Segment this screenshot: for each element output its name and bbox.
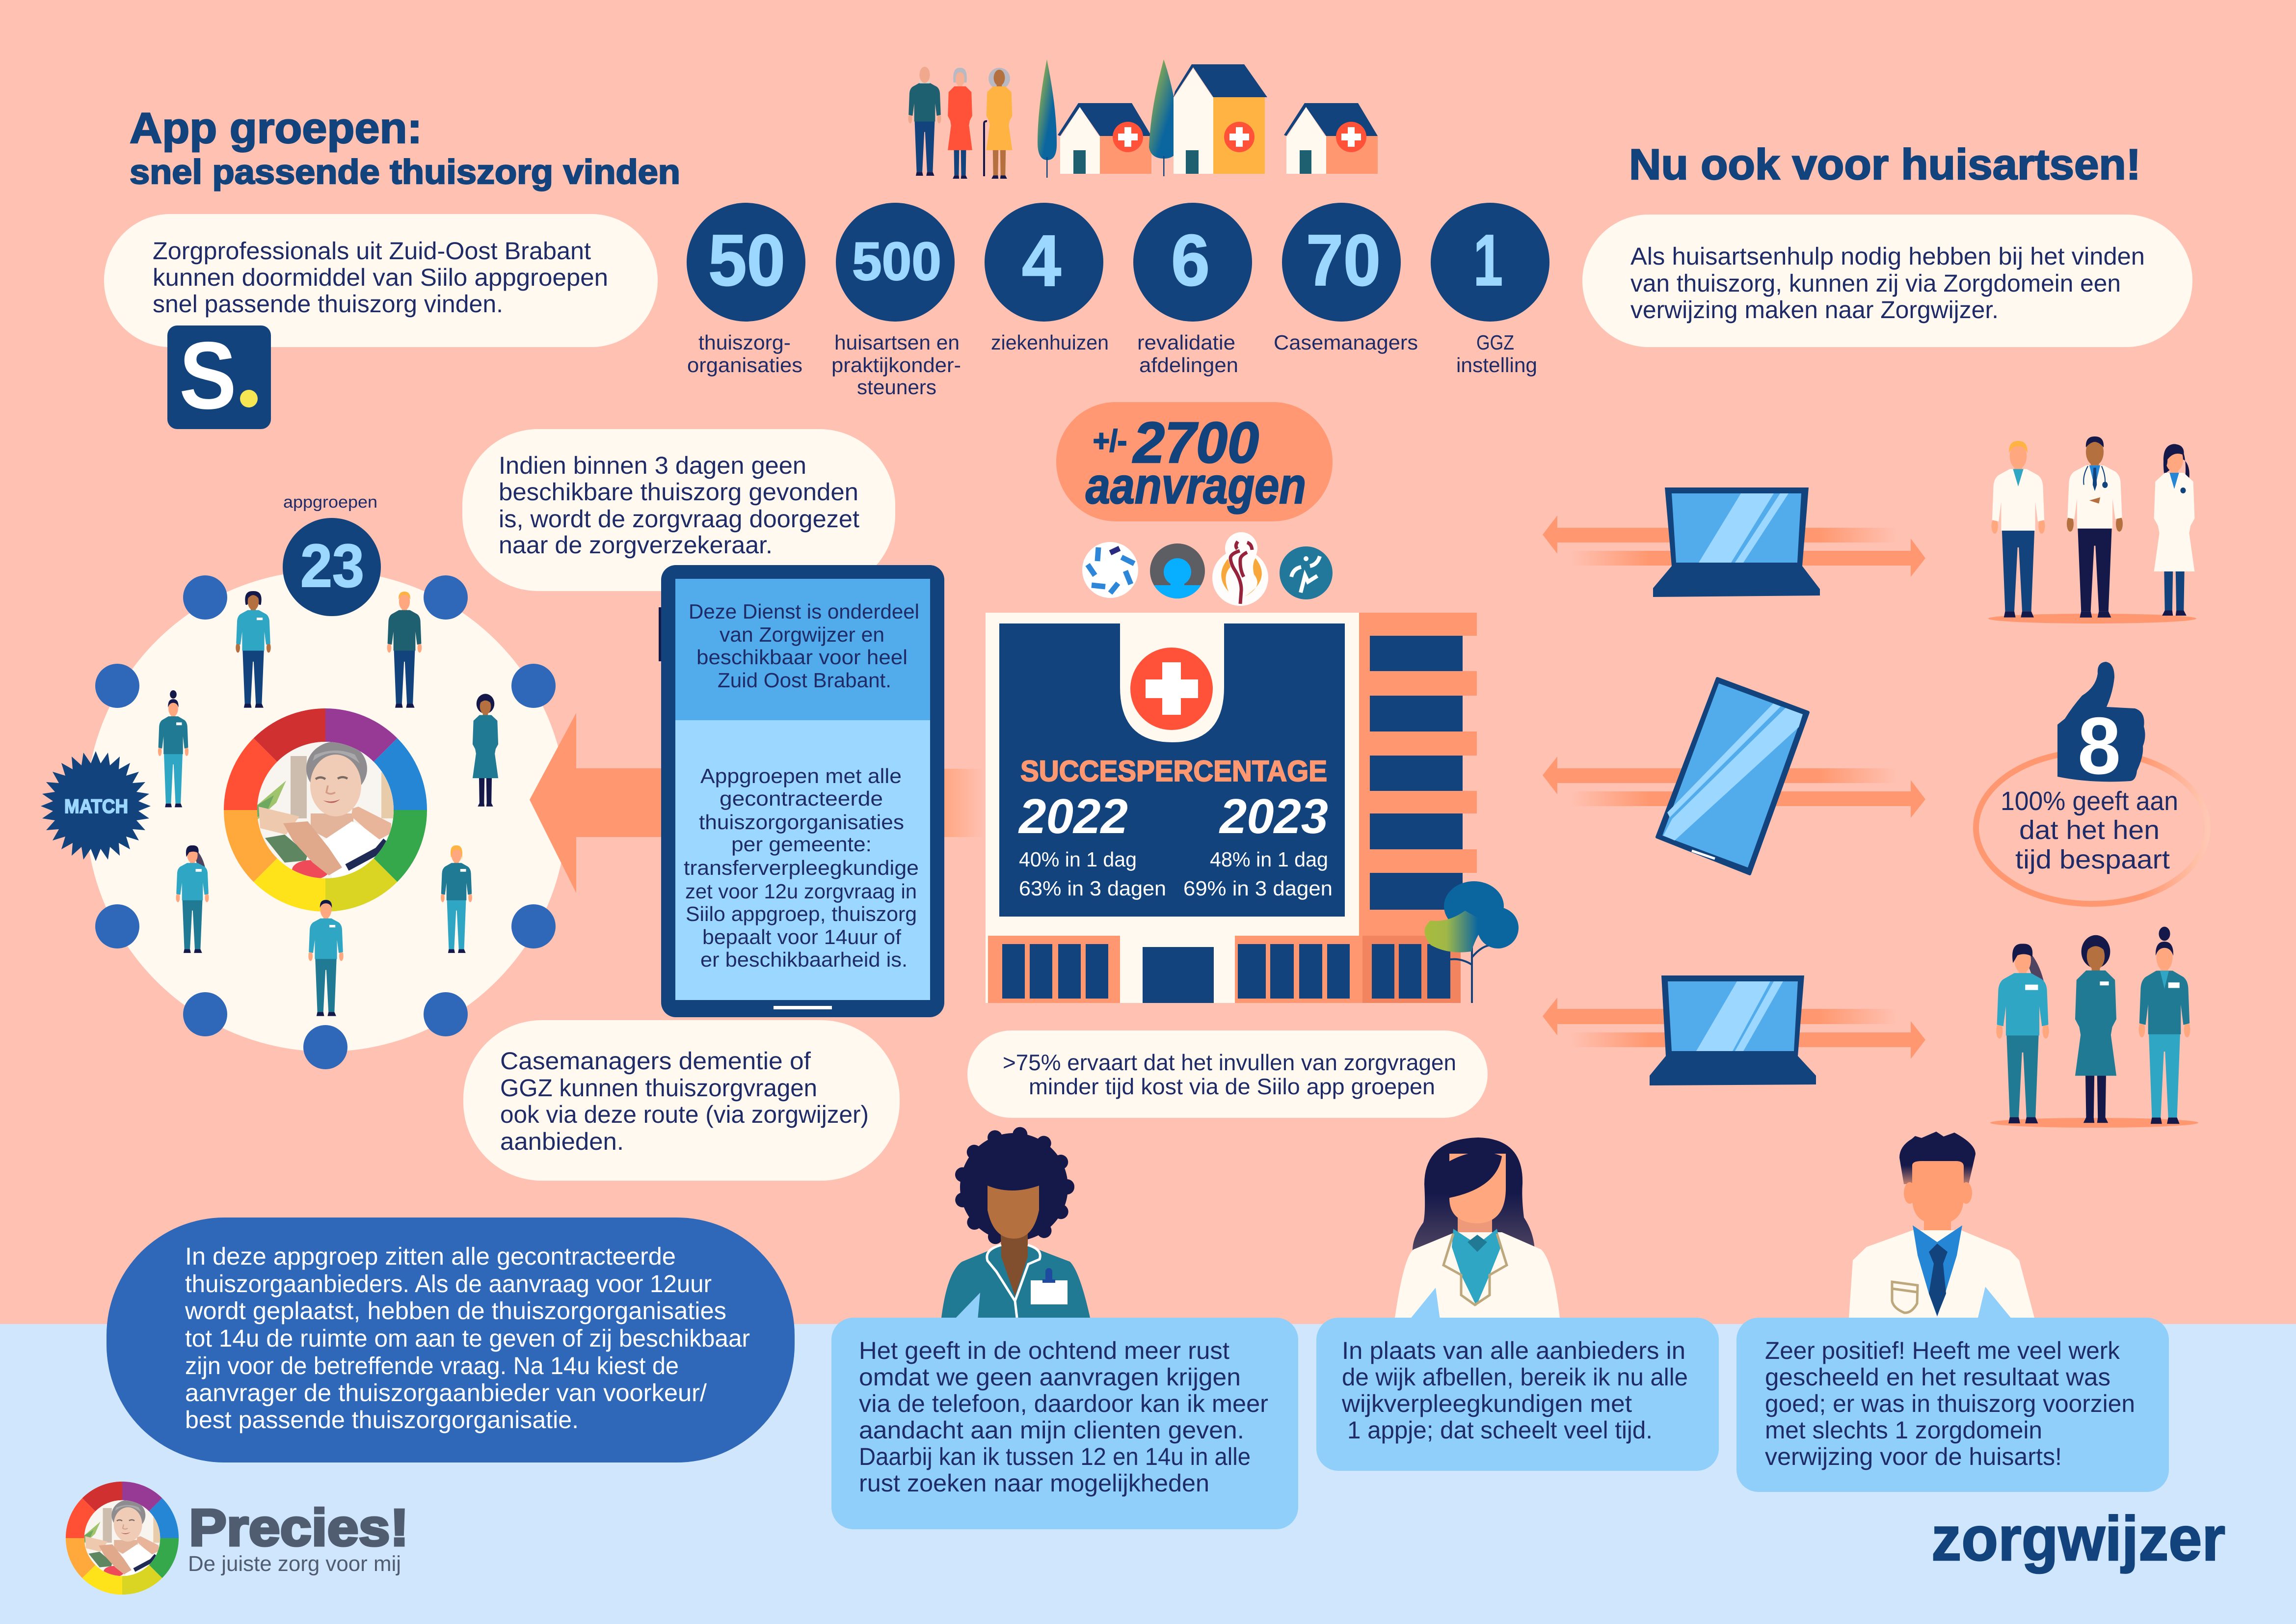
- speech bubble: huisarts quote: met slechts 1 zorgdomein: [1765, 1416, 2042, 1444]
- callout: 2700 aanvragen: 2700: [1132, 410, 1259, 475]
- stat: 70 casemanagers: [1274, 203, 1418, 354]
- stat: 1 GGZ instelling: 1: [1473, 220, 1503, 301]
- icon: tilted tablet: [1657, 678, 1808, 874]
- icon: laptop bottom: [1650, 975, 1816, 1085]
- stat: 1 GGZ instelling: GGZ: [1476, 331, 1514, 354]
- stat: 50 thuiszorgorganisaties: [687, 203, 805, 377]
- panel: 75 procent ervaart: minder tijd kost via de Siilo app groepen: [1029, 1074, 1435, 1099]
- person: nurse in dress: [2075, 935, 2116, 1123]
- phone text: onderdeel van Zorgwijzer: Zuid Oost Brabant.: [718, 669, 891, 692]
- column: 2023: 69% in 3 dagen: [1183, 877, 1333, 900]
- person: female doctor: [2154, 444, 2194, 616]
- person: nurse with bun: [2139, 927, 2190, 1124]
- ground floor windows: [988, 936, 1461, 1003]
- ring: [1976, 752, 2208, 904]
- person: elderly woman in yellow with cane: [984, 68, 1012, 179]
- arrows: huisartsen two way: [1543, 515, 1925, 577]
- person: nurse lower left: [176, 845, 209, 953]
- phone text: appgroepen per gemeente: [684, 764, 919, 971]
- phone text: onderdeel van Zorgwijzer: beschikbaar voor heel: [696, 646, 908, 669]
- person: nurse top left: [236, 591, 271, 708]
- stat: 6 revalidatie afdelingen: revalidatie: [1137, 331, 1235, 354]
- stat: 6 revalidatie afdelingen: 6: [1171, 220, 1210, 301]
- panel: intro zorgprofessionals: Zorgprofessionals uit Zuid-Oost Brabant: [153, 237, 591, 265]
- panel: huisartsen uitleg: van thuiszorg, kunnen zij via Zorgdomein een: [1630, 270, 2121, 297]
- phone text: appgroepen per gemeente: transferverpleegkundige: [684, 856, 919, 879]
- bust: nurse with afro: [941, 1133, 1090, 1318]
- people: thuiszorg: [1990, 927, 2198, 1128]
- tree 2: [1149, 59, 1179, 176]
- tree beside hospital: [1424, 881, 1519, 1003]
- text: tijd bespaart: [2001, 786, 2178, 874]
- panel: zorgvraag doorgezet: naar de zorgverzekeraar.: [499, 531, 773, 559]
- panel: huisartsen uitleg: verwijzing maken naar Zorgwijzer.: [1630, 296, 1999, 324]
- background: light blue lower area: [0, 1324, 2296, 1624]
- text: tijd bespaart: dat het hen: [2019, 815, 2160, 845]
- speech bubble: huisarts quote: verwijzing voor de huisarts!: [1765, 1443, 2062, 1470]
- illustration: three elderly people: [908, 67, 1012, 179]
- stat: 500 huisartsen: steuners: [857, 376, 936, 399]
- phone text: onderdeel van Zorgwijzer: [689, 600, 919, 692]
- person: elderly woman in red: [948, 68, 972, 179]
- icon: Siilo logo: S: [179, 322, 237, 429]
- callout: 2700 aanvragen: +/-: [1093, 424, 1127, 458]
- number: 8: 8: [2078, 701, 2121, 791]
- ground shadow: [1988, 614, 2196, 623]
- house 2: [1174, 64, 1267, 174]
- speech bubble: nurse quote: rust zoeken naar mogelijkheden: [859, 1469, 1209, 1497]
- stat: 1 GGZ instelling: [1431, 203, 1549, 377]
- panel: casemanagers: aanbieden.: [500, 1128, 624, 1155]
- stat: 50 thuiszorgorganisaties: 50: [708, 220, 785, 301]
- column: 2022: 40% in 1 dag: [1019, 848, 1137, 871]
- panel: 75 procent ervaart: >75% ervaart dat het invullen van zorgvragen: [1003, 1050, 1456, 1075]
- person: nurse right: [473, 694, 498, 807]
- panel: appgroep uitleg: zijn voor de betreffende vraag. Na 14u kiest de: [185, 1352, 679, 1380]
- logo: orange and red figure: [1212, 532, 1268, 606]
- panel: appgroep uitleg: aanvrager de thuiszorgaanbieder van voorkeur/: [185, 1379, 707, 1407]
- panel: zorgvraag doorgezet: Indien binnen 3 dagen geen: [499, 452, 806, 479]
- bust: female doctor: [1395, 1137, 1560, 1318]
- diagram: appgroepen circle: [41, 493, 567, 1069]
- stat: 500 huisartsen: praktijkonder-: [831, 353, 961, 377]
- cross emblem: [1120, 623, 1224, 742]
- logo: Precies: [66, 1482, 409, 1595]
- speech bubble: nurse quote: Daarbij kan ik tussen 12 en 14u in alle: [859, 1443, 1251, 1470]
- phone text: appgroepen per gemeente: Appgroepen met alle: [700, 764, 902, 787]
- panel: zorgvraag doorgezet: is, wordt de zorgvraag doorgezet: [499, 505, 859, 533]
- panel: zorgvraag doorgezet: beschikbare thuiszorg gevonden: [499, 478, 858, 506]
- cream circle background: [86, 570, 567, 1052]
- logo: blue dashes: [1082, 542, 1138, 598]
- stat: 500 huisartsen: huisartsen en: [834, 331, 960, 354]
- person: doctor with stethoscope: [2067, 436, 2123, 618]
- stat: 500 huisartsen: [831, 203, 961, 399]
- stat: 1 GGZ instelling: instelling: [1456, 353, 1537, 377]
- panel: casemanagers: ook via deze route (via zorgwijzer): [500, 1101, 869, 1128]
- text: tijd bespaart: tijd bespaart: [2015, 845, 2170, 874]
- phone text: appgroepen per gemeente: Siilo appgroep, thuiszorg: [686, 902, 917, 925]
- speech bubble: wijkverpleegkundige quote: 1 appje; dat scheelt veel tijd.: [1347, 1416, 1653, 1444]
- column: 2023: [1183, 789, 1333, 900]
- heading: SUCCESPERCENTAGE: SUCCESPERCENTAGE: [1020, 755, 1327, 787]
- badge: 23: [283, 518, 381, 616]
- stat: 500 huisartsen: 500: [852, 231, 941, 292]
- panel: appgroep uitleg: [107, 1218, 795, 1462]
- panel: appgroep uitleg: wordt geplaatst, hebben de thuiszorgorganisaties: [185, 1297, 726, 1325]
- panel: intro zorgprofessionals: kunnen doormiddel van Siilo appgroepen: [153, 264, 608, 291]
- panel: intro zorgprofessionals: snel passende thuiszorg vinden.: [153, 290, 503, 318]
- stat: 70 casemanagers: 70: [1306, 220, 1381, 301]
- house 3: [1284, 103, 1378, 174]
- icon: laptop top: [1653, 487, 1820, 597]
- stat: 50 thuiszorgorganisaties: organisaties: [687, 353, 802, 377]
- icon: thumbs up: [2057, 662, 2145, 782]
- speech bubble: nurse quote: Het geeft in de ochtend meer rust: [859, 1337, 1229, 1364]
- phone text: appgroepen per gemeente: bepaalt voor 14uur of: [702, 925, 901, 948]
- panel: appgroep uitleg: tot 14u de ruimte om aan te geven of zij beschikbaar: [185, 1325, 750, 1352]
- speech bubble: wijkverpleegkundige quote: [1316, 1288, 1719, 1471]
- speech bubble: nurse quote: omdat we geen aanvragen krijgen: [859, 1363, 1241, 1391]
- phone text: appgroepen per gemeente: er beschikbaarheid is.: [700, 948, 908, 971]
- speech bubble: huisarts quote: Zeer positief! Heeft me veel werk: [1765, 1337, 2120, 1364]
- phone text: appgroepen per gemeente: per gemeente:: [731, 833, 872, 856]
- person: blond doctor: [1991, 441, 2045, 618]
- callout: 2700 aanvragen: [1056, 402, 1333, 521]
- text: tijd bespaart: 100% geeft aan: [2001, 786, 2178, 816]
- stat: 6 revalidatie afdelingen: afdelingen: [1139, 353, 1238, 377]
- panel: casemanagers: GGZ kunnen thuiszorgvragen: [500, 1074, 817, 1102]
- speech bubble: nurse quote: aandacht aan mijn clienten geven.: [859, 1416, 1244, 1444]
- panel: huisartsen uitleg: [1582, 215, 2192, 347]
- panel: huisartsen uitleg: Als huisartsenhulp nodig hebben bij het vinden: [1630, 243, 2145, 270]
- phone text: appgroepen per gemeente: thuiszorgorganisaties: [699, 811, 904, 834]
- speech bubble: nurse quote: [831, 1293, 1298, 1529]
- logo: grey ring with figure: [1150, 543, 1205, 598]
- person: nurse bottom centre: [308, 900, 344, 1016]
- title: App groepen: [130, 104, 680, 191]
- person: nurse lower right: [441, 845, 472, 953]
- badge: MATCH starburst: [41, 751, 151, 861]
- title: App groepen: snel passende thuiszorg vinden: [130, 153, 680, 191]
- column: 2022: [1018, 789, 1166, 900]
- wordmark: Precies: Precies!: [189, 1499, 409, 1557]
- speech bubble: wijkverpleegkundige quote: de wijk afbellen, bereik ik nu alle: [1342, 1363, 1688, 1391]
- building body: [986, 613, 1359, 1003]
- logos: zorgorganisaties: [1082, 532, 1333, 606]
- tree 1: [1038, 59, 1057, 178]
- panel: casemanagers: [463, 1020, 900, 1181]
- photo: elderly woman in colour ring: [224, 708, 427, 912]
- house 1: [1058, 103, 1151, 174]
- tower with windows: [1359, 613, 1477, 936]
- speech bubble: huisarts quote: goed; er was in thuiszorg voorzien: [1765, 1390, 2135, 1417]
- panel: intro zorgprofessionals: [104, 214, 658, 347]
- logo: teal running figure: [1280, 546, 1333, 599]
- panel: appgroep uitleg: best passende thuiszorgorganisatie.: [185, 1406, 579, 1434]
- arrows: thuiszorg two way: [1543, 998, 1925, 1059]
- logo: zorgwijzer: zorgwijzer: [1931, 1504, 2225, 1574]
- speech bubble: wijkverpleegkundige quote: In plaats van alle aanbieders in: [1342, 1337, 1685, 1364]
- column: 2023: 48% in 1 dag: [1210, 848, 1328, 871]
- callout: 8 thumbs up 100 procent: [1976, 662, 2208, 904]
- callout: 2700 aanvragen: aanvragen: [1086, 458, 1306, 514]
- panel: 75 procent ervaart: [967, 1030, 1488, 1118]
- speech bubble: huisarts quote: [1736, 1287, 2169, 1492]
- bust: male doctor: [1849, 1132, 2034, 1318]
- stat: 4 ziekenhuizen: 4: [1022, 220, 1061, 301]
- stat: 4 ziekenhuizen: ziekenhuizen: [991, 331, 1109, 354]
- person: nurse left: [158, 690, 188, 807]
- stat: 70 casemanagers: Casemanagers: [1274, 331, 1418, 354]
- badge: 23: 23: [300, 532, 364, 600]
- phone: Zorgwijzer dienst: [659, 565, 944, 1017]
- person: nurse long hair: [1996, 944, 2049, 1123]
- phone text: appgroepen per gemeente: zet voor 12u zorgvraag in: [685, 880, 917, 903]
- person: elderly man: [908, 67, 941, 176]
- stat: 4 ziekenhuizen: [985, 203, 1109, 354]
- ground shadow: [1990, 1118, 2198, 1128]
- badge: MATCH starburst: MATCH: [64, 796, 128, 817]
- stat: 6 revalidatie afdelingen: [1133, 203, 1252, 377]
- tagline: De juiste zorg voor mij: [188, 1552, 401, 1576]
- illustration: houses and trees: [1038, 59, 1378, 178]
- phone text: onderdeel van Zorgwijzer: Deze Dienst is onderdeel: [689, 600, 919, 623]
- speech bubble: huisarts quote: gescheeld en het resultaat was: [1765, 1363, 2110, 1391]
- phone text: onderdeel van Zorgwijzer: van Zorgwijzer en: [720, 623, 884, 646]
- column: 2023: 2023: [1219, 789, 1328, 844]
- arrow: large arrow from phone to circle: [530, 713, 983, 893]
- panel: zorgvraag doorgezet: [462, 429, 895, 591]
- heading: Nu ook voor huisartsen: Nu ook voor huisartsen!: [1629, 140, 2141, 189]
- speech bubble: nurse quote: via de telefoon, daardoor kan ik meer: [859, 1390, 1268, 1417]
- stat: 50 thuiszorgorganisaties: thuiszorg-: [698, 331, 791, 354]
- panel: appgroep uitleg: thuiszorgaanbieders. Als de aanvraag voor 12uur: [185, 1270, 712, 1298]
- column: 2022: 63% in 3 dagen: [1019, 877, 1166, 900]
- icon: Siilo logo: [167, 322, 271, 429]
- people: huisartsen: [1988, 436, 2196, 623]
- person: carer top right: [387, 592, 422, 708]
- phone text: appgroepen per gemeente: gecontracteerde: [720, 787, 883, 810]
- navy sign panel: [999, 623, 1345, 917]
- building: hospital with succespercentage: [986, 613, 1519, 1003]
- blue dots around circle: [95, 575, 556, 1069]
- speech bubble: wijkverpleegkundige quote: wijkverpleegkundigen met: [1341, 1390, 1632, 1417]
- panel: casemanagers: Casemanagers dementie of: [500, 1047, 811, 1075]
- column: 2022: 2022: [1018, 789, 1128, 844]
- panel: appgroep uitleg: In deze appgroep zitten alle gecontracteerde: [185, 1243, 676, 1270]
- label: appgroepen: appgroepen: [283, 493, 377, 512]
- arrows: phone two way: [1543, 757, 1925, 818]
- logo mark: photo in ring: [66, 1482, 179, 1595]
- title: App groepen: App groepen:: [130, 104, 422, 152]
